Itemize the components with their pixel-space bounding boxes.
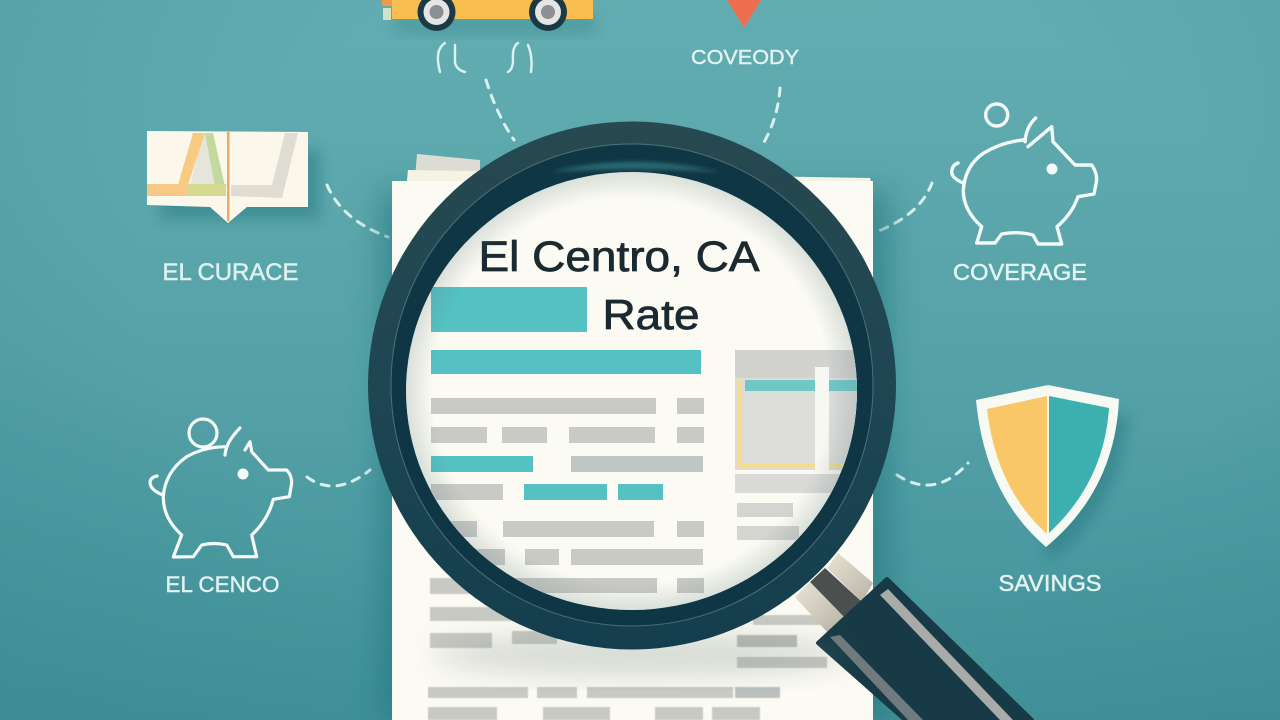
gray text rows [431, 398, 704, 593]
heading: El Centro, CA: El Centro, CA [478, 233, 760, 281]
magnifier lens shadow [430, 633, 850, 677]
label: coveody: COVEODY [691, 46, 799, 69]
icon: piggy bank left [150, 419, 292, 557]
panel: paper document [380, 154, 890, 720]
magnifier lens content [400, 165, 865, 615]
document rows below the lens [428, 503, 827, 720]
icon: piggy bank right [952, 104, 1097, 244]
teal bars [431, 287, 701, 500]
icon: orange location pin tip [727, 0, 761, 28]
icon: yellow truck with wheels [382, 0, 595, 34]
icon: map callout [147, 131, 320, 223]
label: coverage: COVERAGE [953, 259, 1087, 285]
magnifier ring [368, 122, 896, 650]
label: el curace: EL CURACE [162, 259, 298, 286]
label: el cenco: EL CENCO [166, 572, 280, 597]
metal collar [795, 553, 873, 632]
heading: Rate: Rate [602, 291, 700, 338]
magnifier handle [795, 553, 1032, 720]
icon: shield [976, 385, 1128, 560]
dashed connectors [307, 80, 968, 486]
label: top left glyphs [438, 43, 532, 72]
side image thumbnail [735, 350, 860, 540]
black grip [818, 579, 1032, 720]
label: savings: SAVINGS [998, 570, 1102, 596]
